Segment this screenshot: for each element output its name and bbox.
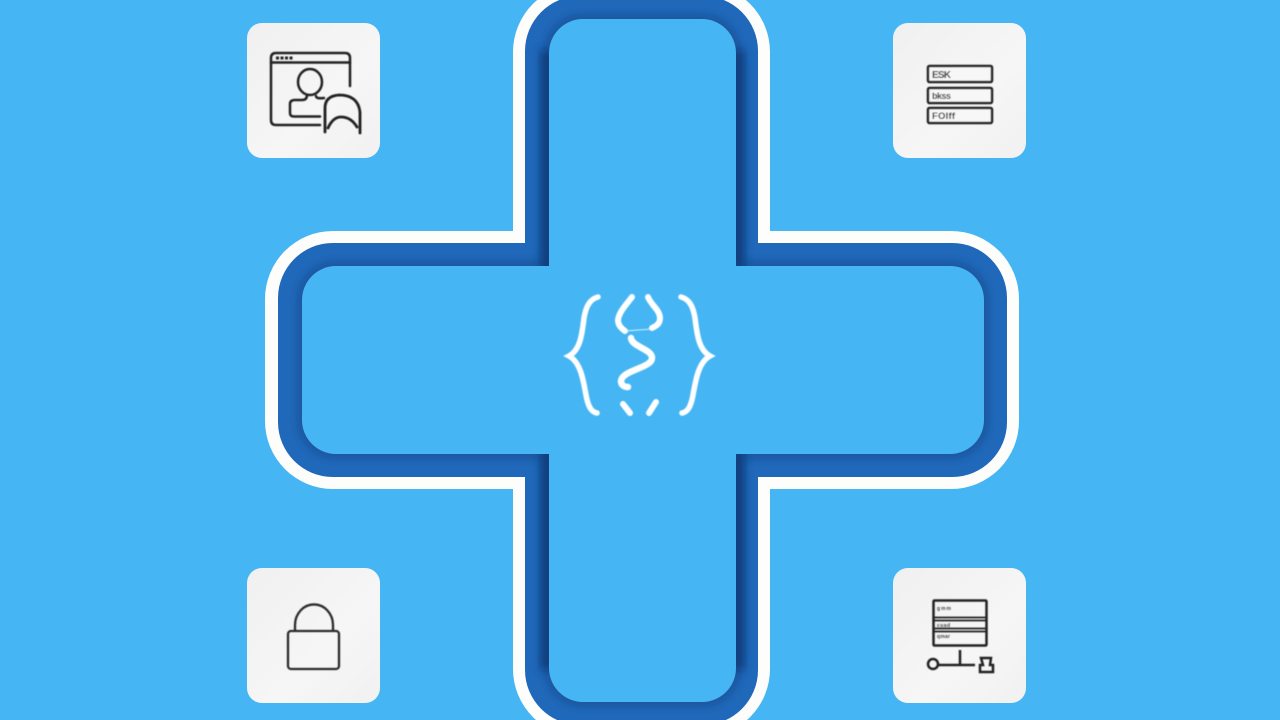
card: server network <box>893 568 1026 703</box>
cross: white outer border <box>265 0 1019 720</box>
icon: user profile window <box>271 53 360 133</box>
card: padlock <box>247 568 380 703</box>
icon: padlock <box>288 604 339 669</box>
icon: form field rows: FOIff <box>932 111 956 122</box>
icon: server rack and network: cuad <box>937 623 950 629</box>
central cross <box>260 0 1020 720</box>
icon: form field rows <box>928 66 992 123</box>
icon: form field rows: ESK <box>932 70 952 81</box>
card: form fields <box>893 23 1026 158</box>
cross: blue bevel <box>260 0 1020 720</box>
icon: server rack and network: gmm <box>937 606 952 612</box>
icon: form field rows: bkss <box>932 91 951 101</box>
card: user window <box>247 23 380 158</box>
icon: server rack and network: qmar <box>937 634 950 640</box>
cross: light blue face <box>302 19 984 702</box>
icon: server rack and network <box>928 600 993 672</box>
icon: code braces <box>569 297 710 413</box>
